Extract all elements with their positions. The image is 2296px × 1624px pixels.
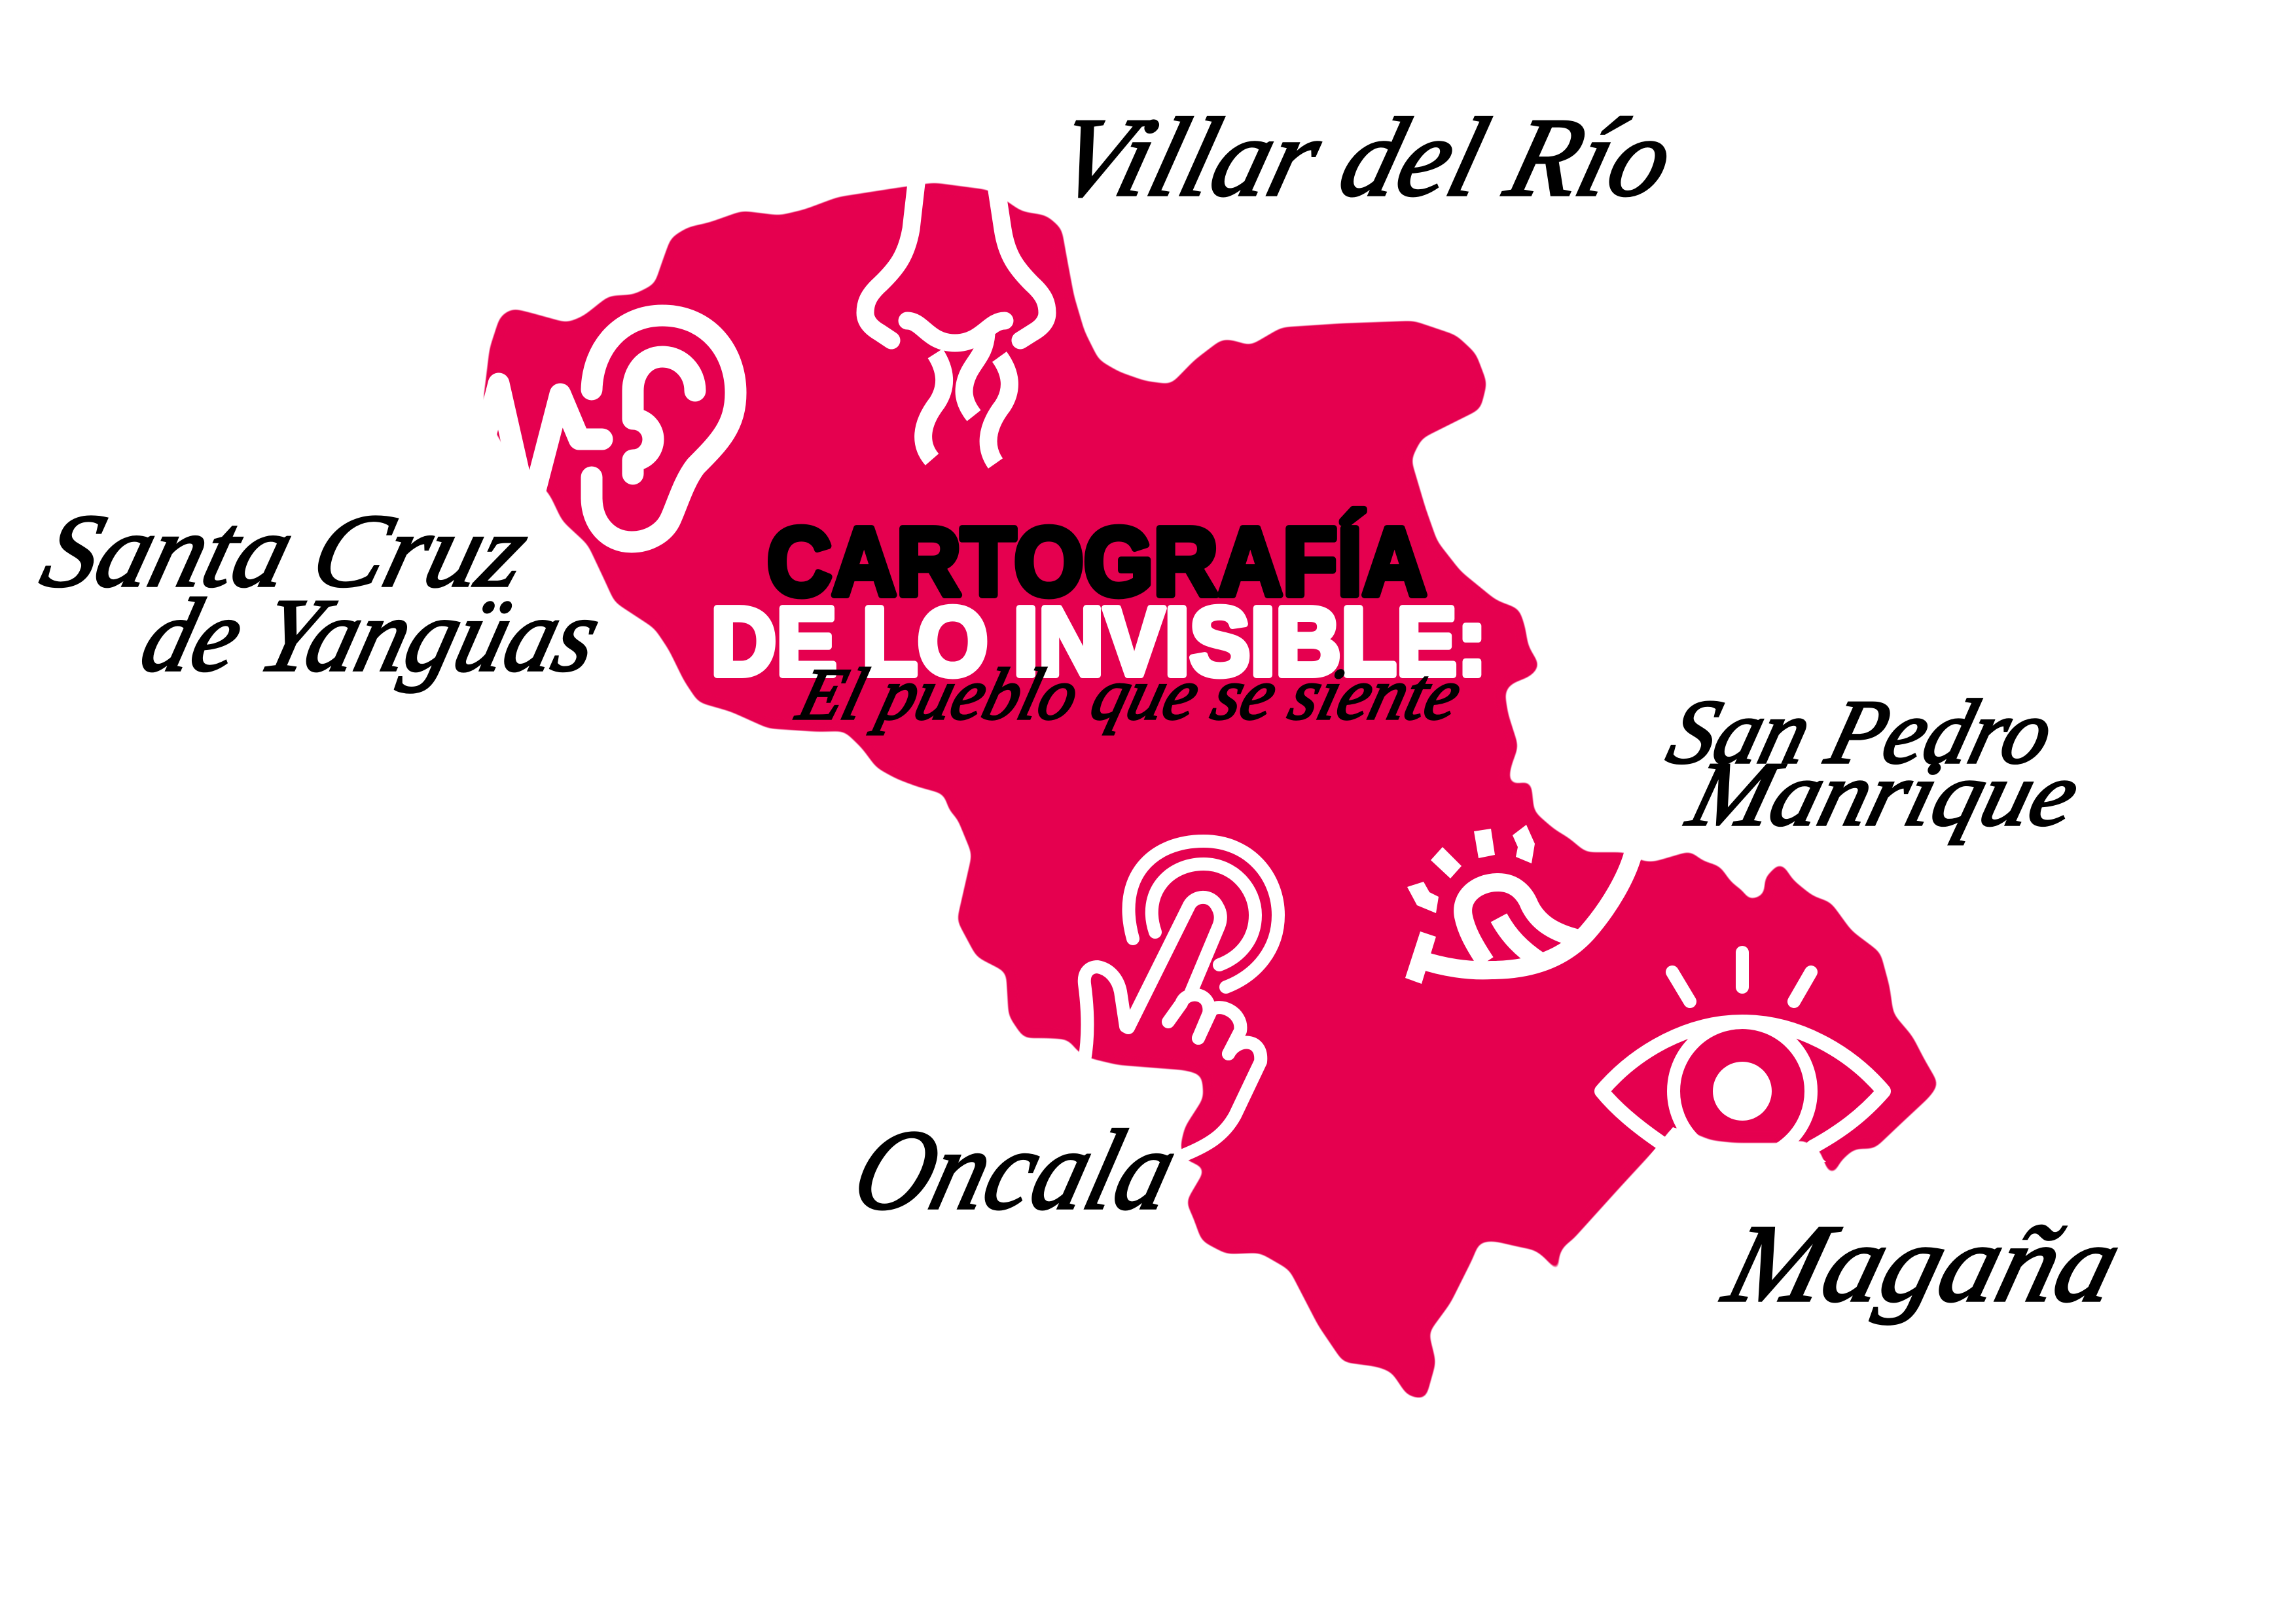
title xyxy=(711,508,1487,696)
title line 2: DE LO INVISIBLE: xyxy=(711,588,1487,696)
label: San Pedro Manrique xyxy=(1659,681,2089,844)
icon: eye xyxy=(1602,952,1884,1172)
map of the territory xyxy=(483,183,1939,1399)
subtitle: El pueblo que se siente xyxy=(789,653,1470,735)
icon: nose with scent xyxy=(865,183,1047,463)
label: Santa Cruz de Yangüas: de Yangüas xyxy=(131,578,612,693)
label: San Pedro Manrique: Manrique xyxy=(1678,743,2089,844)
title line 1: CARTOGRAFÍA xyxy=(767,508,1427,616)
icon: ear with sound pulse xyxy=(483,316,736,542)
icon: mouth xyxy=(1405,825,1633,984)
label: San Pedro Manrique: San Pedro xyxy=(1659,681,2064,782)
label: Villar del Río: Villar del Río xyxy=(1044,95,1686,219)
icon: hand touching xyxy=(1085,841,1278,1155)
label: Santa Cruz de Yangüas xyxy=(31,494,612,693)
label: Oncala: Oncala xyxy=(842,1106,1190,1233)
label: Santa Cruz de Yangüas: Santa Cruz xyxy=(31,494,540,609)
label: Magaña: Magaña xyxy=(1712,1202,2133,1325)
